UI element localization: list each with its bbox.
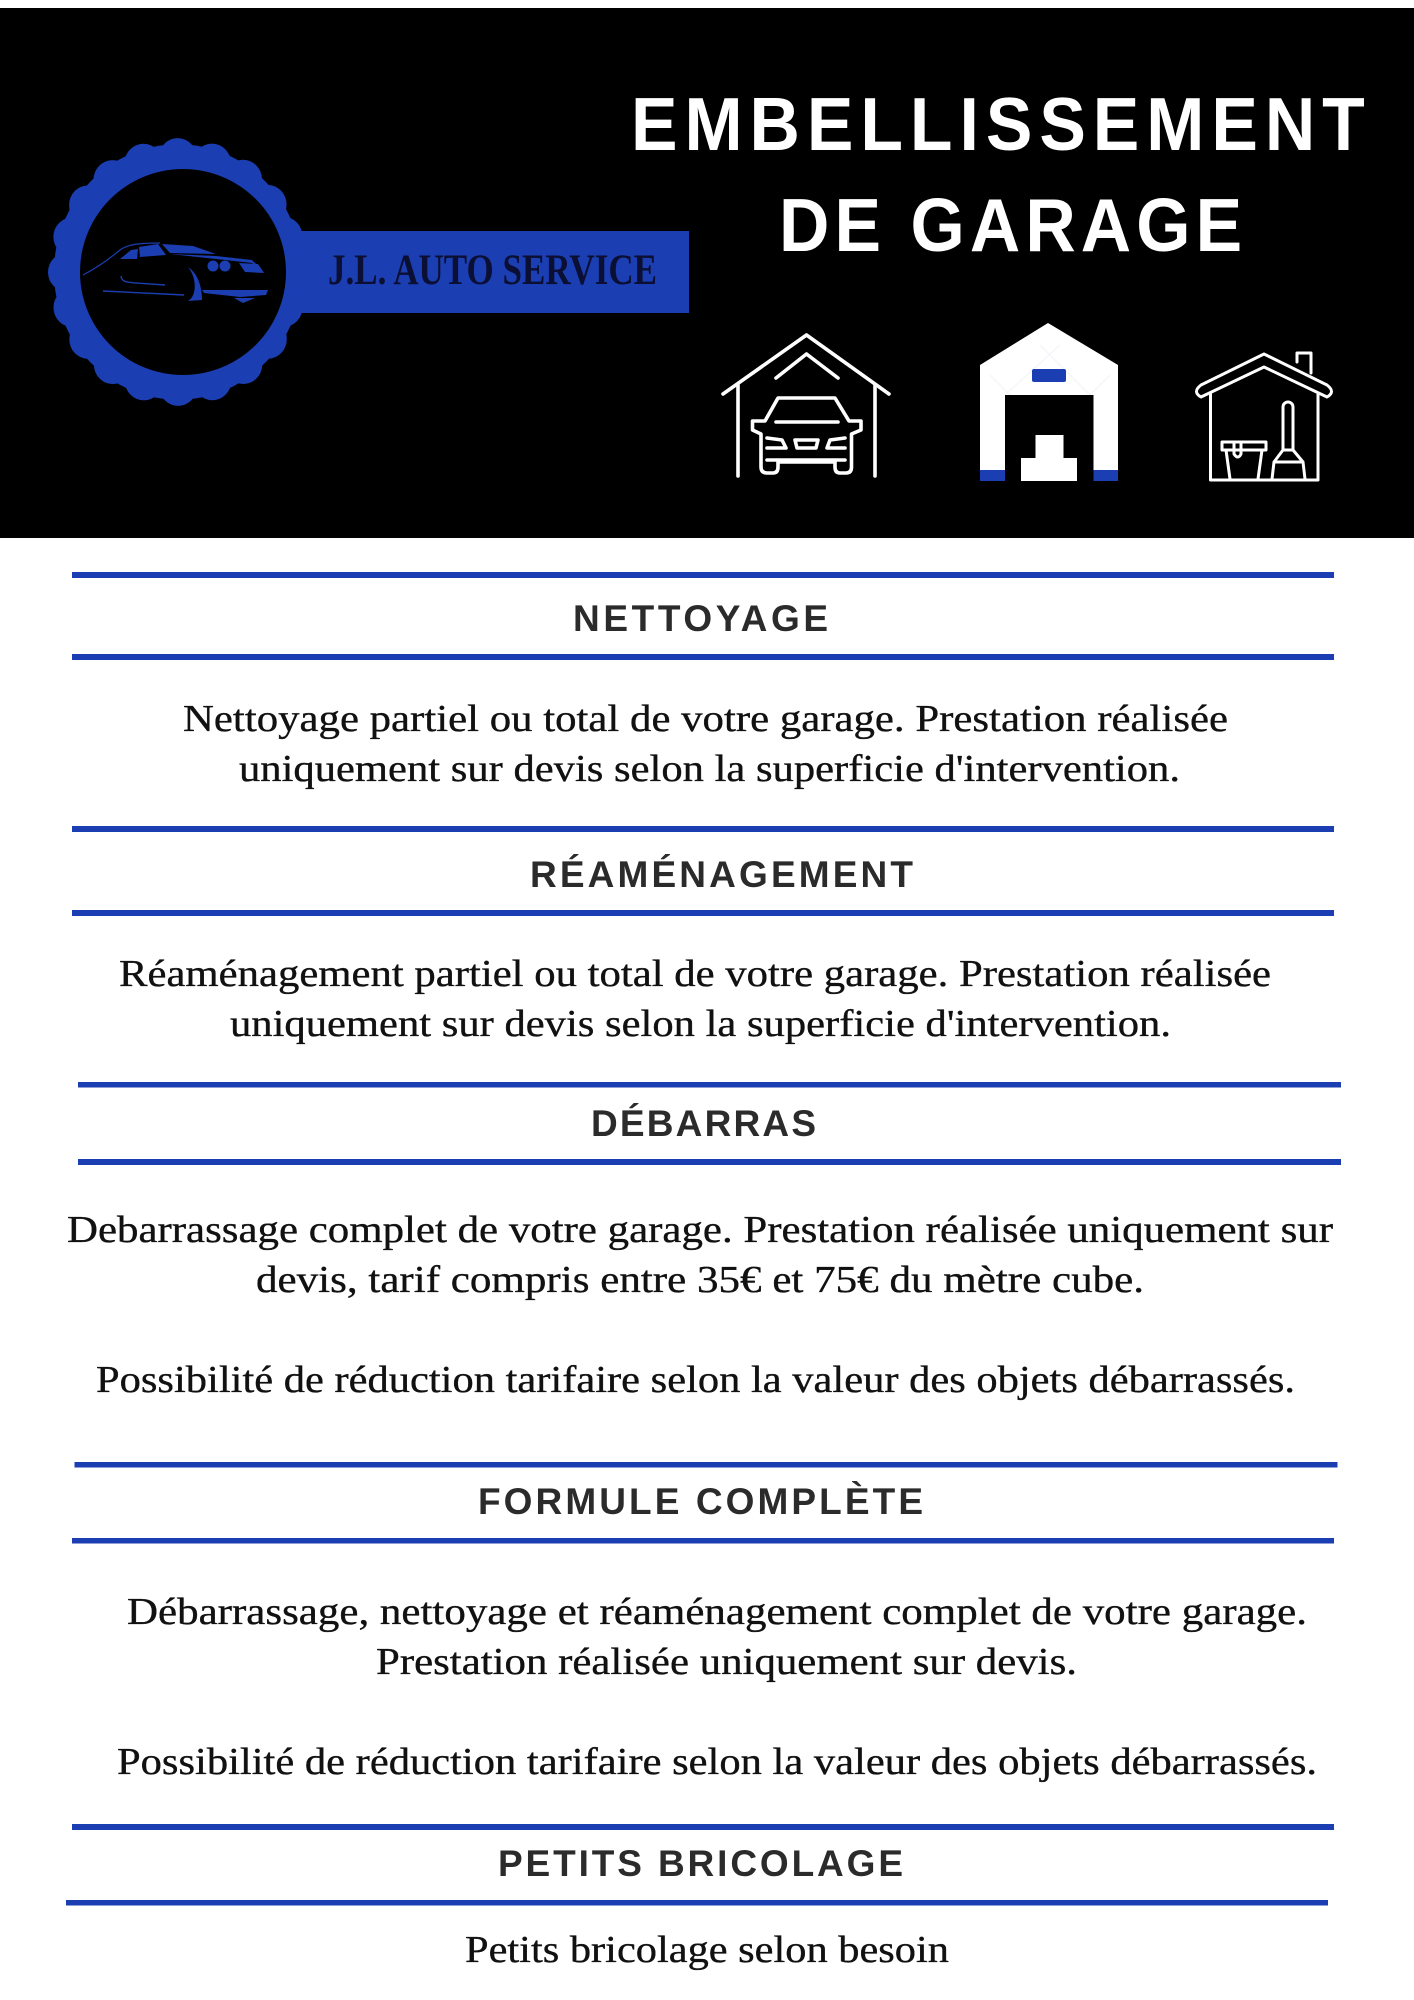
heading: Formule complète: FORMULE COMPLÈTE bbox=[478, 1481, 923, 1522]
icon: house with bucket and broom bbox=[1196, 353, 1332, 480]
section: Nettoyage bbox=[72, 572, 1334, 790]
text: Réaménagement description: Réaménagement partiel ou total de votre garage. Prestation réalisée bbox=[119, 953, 1271, 995]
section: Petits bricolage bbox=[66, 1824, 1334, 1971]
heading: Petits bricolage: PETITS BRICOLAGE bbox=[498, 1843, 903, 1884]
section: Débarras bbox=[67, 1082, 1341, 1401]
text: Réaménagement description: uniquement sur devis selon la superficie d'intervention. bbox=[230, 1003, 1171, 1045]
logo: J.L. Auto Service badge bbox=[54, 144, 689, 400]
heading: Réaménagement: RÉAMÉNAGEMENT bbox=[530, 854, 913, 895]
logo scalloped gear bbox=[54, 144, 302, 400]
text: Formule complète description bbox=[117, 1591, 1317, 1783]
heading: Débarras: DÉBARRAS bbox=[591, 1103, 816, 1144]
text: Réaménagement description bbox=[119, 953, 1271, 1045]
panel: header banner bbox=[0, 8, 1414, 538]
text: Débarras description: devis, tarif compris entre 35€ et 75€ du mètre cube. bbox=[256, 1259, 1144, 1301]
icon: warehouse with boxes bbox=[980, 323, 1118, 481]
text: Nettoyage description bbox=[183, 698, 1228, 790]
text: Débarras description: Debarrassage complet de votre garage. Prestation réalisée uniquement sur bbox=[67, 1209, 1333, 1251]
section: Formule complète bbox=[72, 1462, 1338, 1783]
text: Formule complète description: Possibilité de réduction tarifaire selon la valeur des objets débarrassés. bbox=[117, 1741, 1317, 1783]
icon: garage with car bbox=[723, 335, 889, 476]
text: Débarras description: Possibilité de réduction tarifaire selon la valeur des objets débarrassés. bbox=[96, 1359, 1295, 1401]
logo ribbon bbox=[290, 231, 689, 313]
heading: Nettoyage: NETTOYAGE bbox=[573, 598, 828, 639]
section: Réaménagement bbox=[72, 826, 1334, 1045]
text: Formule complète description: Débarrassage, nettoyage et réaménagement complet de votre garage. bbox=[127, 1591, 1307, 1633]
text: Formule complète description: Prestation réalisée uniquement sur devis. bbox=[376, 1641, 1077, 1683]
text: Débarras description bbox=[67, 1209, 1333, 1401]
title: DE GARAGE bbox=[779, 184, 1242, 268]
text: Nettoyage description: uniquement sur devis selon la superficie d'intervention. bbox=[239, 748, 1180, 790]
icon: car silhouette bbox=[83, 243, 268, 303]
text: Petits bricolage description: Petits bricolage selon besoin bbox=[465, 1929, 949, 1971]
title bbox=[631, 83, 1365, 268]
text: Nettoyage description: Nettoyage partiel ou total de votre garage. Prestation réalisée bbox=[183, 698, 1228, 740]
title: EMBELLISSEMENT bbox=[631, 83, 1365, 167]
logo ribbon: J.L. AUTO SERVICE bbox=[328, 247, 657, 294]
